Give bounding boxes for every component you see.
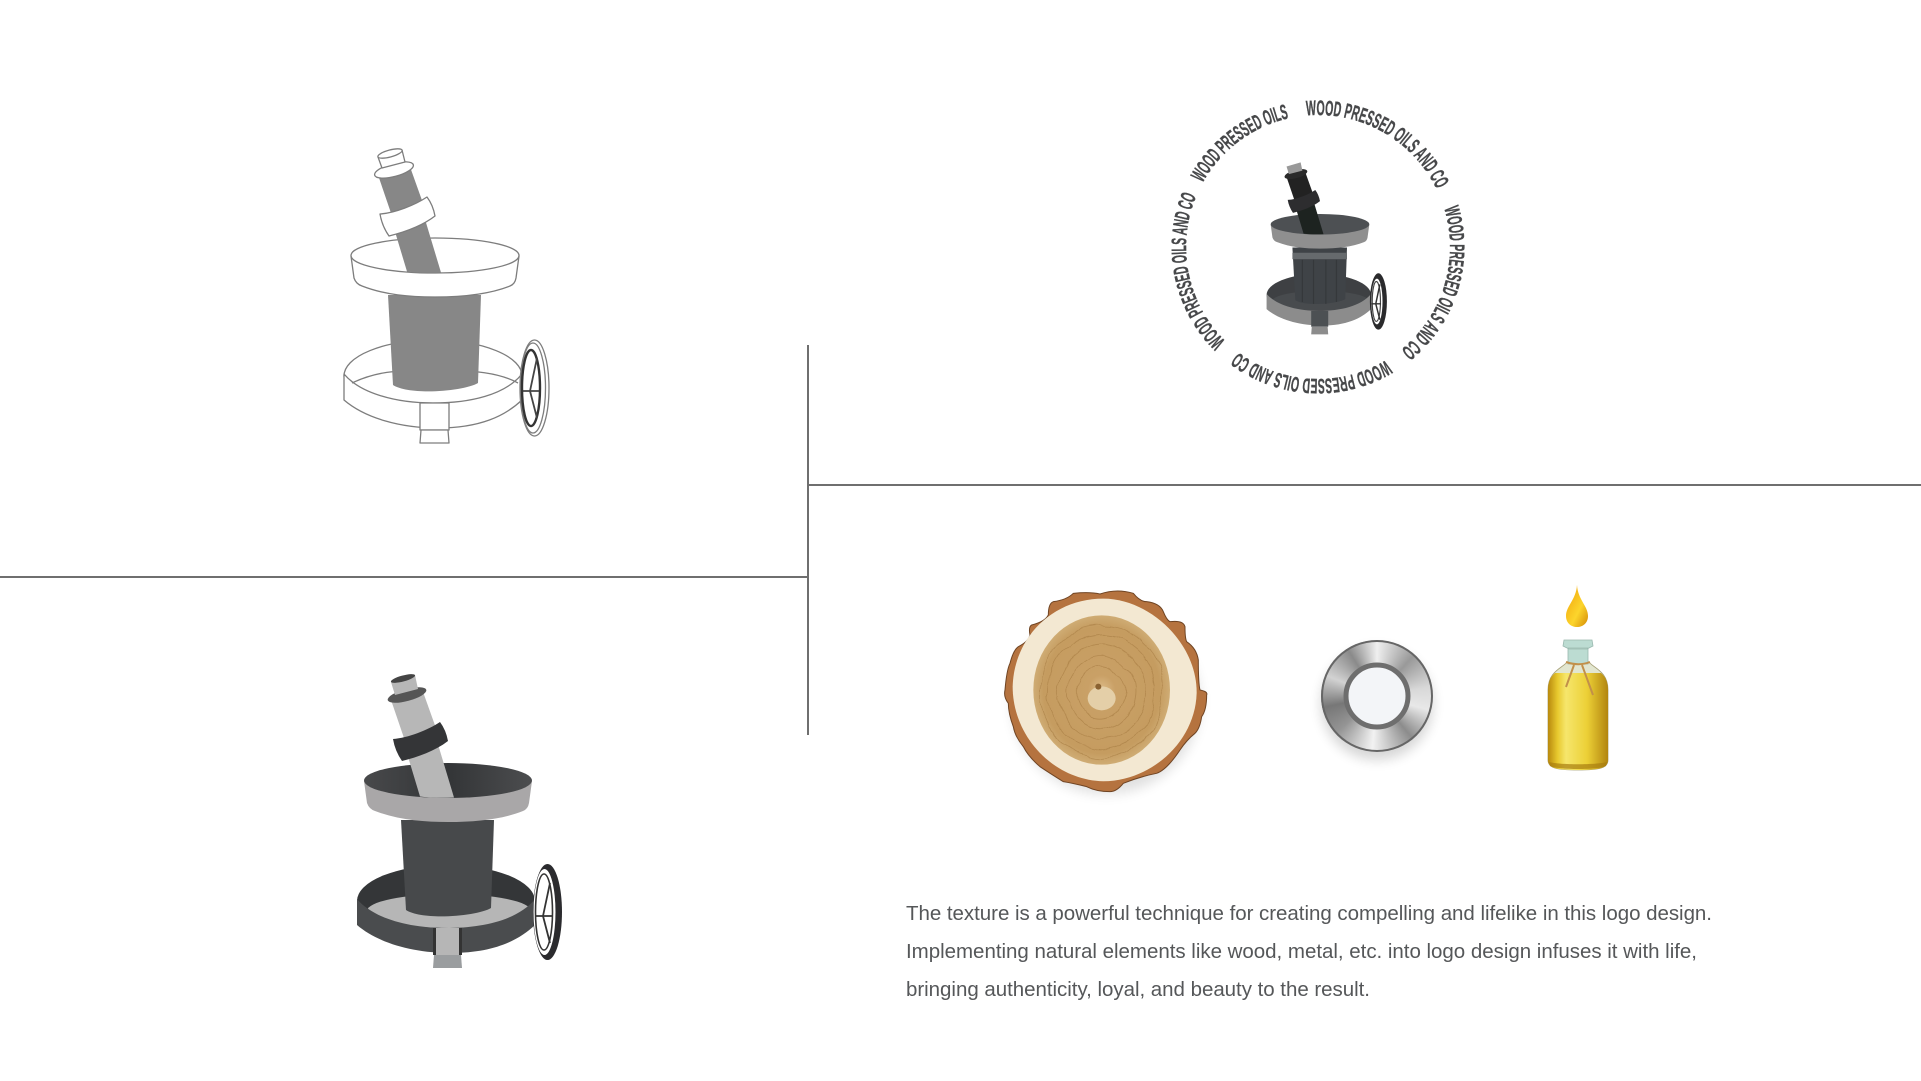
logo: outline version — [344, 147, 549, 443]
press cylinder — [388, 295, 481, 391]
pestle — [373, 147, 441, 273]
upper rim — [351, 238, 519, 297]
circular text: WOOD PRESSED OILS AND CO — [1232, 354, 1394, 394]
icon: metal ring — [1321, 640, 1433, 760]
hand wheel — [1370, 273, 1387, 330]
icon: wood slice — [1005, 591, 1207, 794]
press cylinder — [401, 820, 494, 916]
hand wheel — [520, 340, 549, 436]
tray — [1267, 274, 1371, 326]
bottle neck — [1563, 640, 1593, 664]
tray — [357, 865, 535, 953]
pestle — [386, 672, 454, 798]
body text: Implementing natural elements like wood, metal, etc. into logo design infuses it with life, — [906, 940, 1697, 963]
twine — [1566, 662, 1593, 695]
circular text: WOOD PRESSED OILS AND CO — [1171, 192, 1224, 352]
body text: bringing authenticity, loyal, and beauty to the result. — [906, 978, 1370, 1001]
hand wheel — [533, 864, 562, 960]
circular text: WOOD PRESSED OILS AND CO — [1402, 204, 1465, 360]
foot — [1311, 311, 1328, 334]
icon: oil bottle — [1548, 585, 1608, 770]
foot — [433, 928, 462, 968]
circular text: WOOD PRESSED OILS — [1190, 104, 1288, 182]
logo: filled grey version — [357, 672, 562, 968]
divider: left horizontal — [0, 576, 808, 578]
badge emblem — [1267, 162, 1387, 334]
oil drop — [1566, 585, 1588, 627]
body text — [906, 902, 1712, 1001]
body text: The texture is a powerful technique for creating compelling and lifelike in this logo design. — [906, 902, 1712, 925]
divider: right horizontal — [808, 484, 1921, 486]
upper rim — [1271, 214, 1369, 249]
pestle — [1284, 162, 1324, 234]
press cylinder — [1292, 247, 1347, 304]
circular text — [1171, 100, 1465, 394]
logo: circular badge — [1171, 100, 1465, 394]
divider: vertical — [807, 345, 809, 735]
tray — [344, 340, 522, 428]
upper rim — [364, 763, 532, 822]
foot — [420, 403, 449, 443]
bottle body — [1548, 660, 1608, 770]
circular text: WOOD PRESSED OILS AND CO — [1306, 100, 1448, 188]
